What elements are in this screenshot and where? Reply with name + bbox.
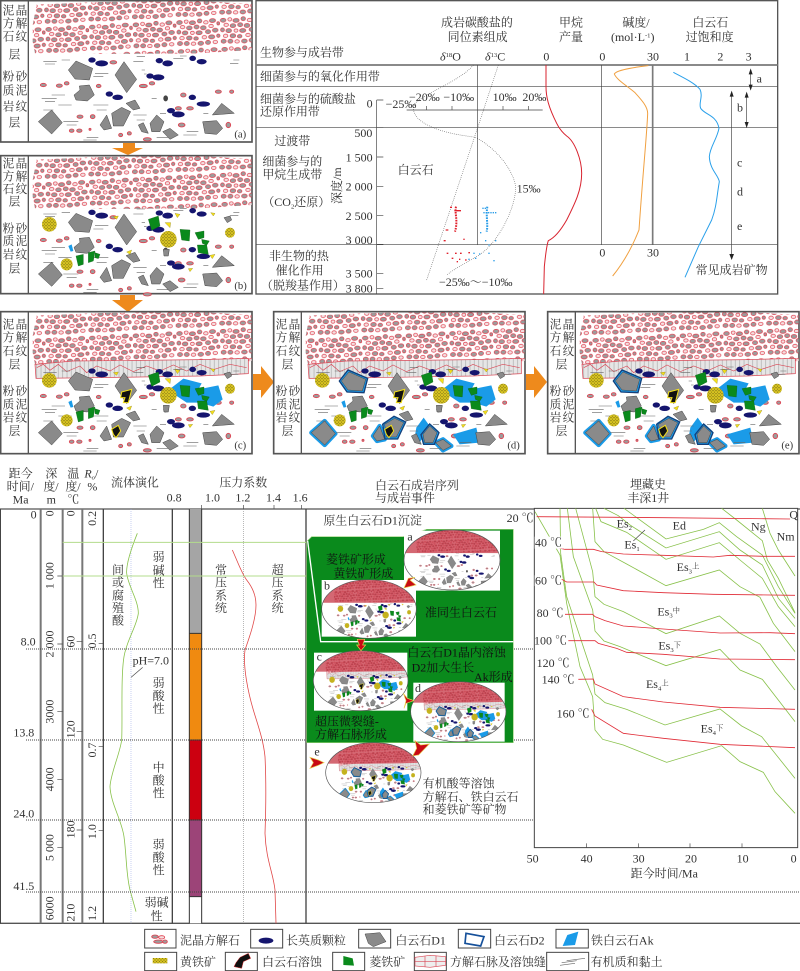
legend: organic matter and clay: 有机质和黏土: [591, 954, 663, 969]
time labels: 0: [31, 508, 37, 522]
arrow: c to d: [253, 366, 274, 398]
panel: stage (e): 粉砂: [550, 384, 576, 398]
fluid and pressure labels: 性: [153, 575, 165, 590]
panel: stage (b): (b): [234, 281, 247, 292]
zone arrows a b: c: [737, 156, 742, 170]
strata and isotherm labels: [534, 508, 798, 737]
legend: ankerite: 铁白云石Ak: [591, 932, 654, 947]
depth temperature Ro labels: 60: [64, 636, 78, 648]
depth temperature Ro labels: 1.2: [85, 906, 99, 921]
sequence event labels: c: [317, 649, 322, 663]
panel: stage (a): (a): [234, 129, 247, 140]
panel: stage (c): 岩纹: [3, 411, 29, 425]
pressure curve: [232, 550, 276, 923]
fluid and pressure labels: 超: [272, 562, 284, 577]
column headers: 甲烷: [559, 14, 583, 29]
panel: stage (c): (c): [234, 440, 247, 451]
strata and isotherm labels: 上: [661, 679, 669, 688]
isotope axis and depth labels: −25‰: [386, 97, 416, 111]
green highlight zone: [307, 529, 513, 743]
fluid and pressure labels: 统: [215, 600, 227, 615]
depth temperature Ro labels: 0.7: [85, 743, 99, 757]
strata and isotherm labels: Es: [657, 604, 669, 618]
zone arrows a b: a: [757, 72, 763, 86]
legend: [145, 929, 663, 971]
column headers: 2: [717, 49, 723, 63]
isotope axis and depth labels: 0: [599, 246, 605, 260]
strata and isotherm labels: 140 ℃: [542, 673, 575, 687]
isotope axis and depth labels: 1 500: [346, 151, 373, 165]
isotope axis and depth labels: −10‰: [443, 90, 474, 104]
strata and isotherm labels: Es: [701, 722, 713, 736]
time labels: 13.8: [13, 726, 34, 740]
isotope axis and depth labels: 白云石: [398, 163, 434, 177]
legend: micrite: [145, 929, 240, 948]
strata and isotherm labels: 60 ℃: [535, 573, 562, 587]
sequence event labels: d: [415, 681, 421, 695]
panel: stage (a): 石纹: [3, 31, 29, 44]
isotope axis and depth labels: 3 000: [346, 233, 373, 247]
strata and isotherm labels: 下: [674, 640, 682, 649]
fluid and pressure labels: 统: [272, 600, 284, 615]
strata and isotherm labels: Nm: [777, 529, 795, 543]
sequence event labels: 有机酸等溶蚀: [423, 776, 496, 791]
dolomite saturation curve: [673, 72, 719, 277]
strata and isotherm labels: 3: [689, 568, 693, 575]
strata and isotherm labels: 3: [670, 647, 674, 654]
strata and isotherm labels: 下: [716, 723, 724, 732]
legend: micrite: 泥晶方解石: [180, 932, 240, 947]
axis headers: Ma: [13, 492, 29, 506]
panel: stage (c): 质泥: [3, 397, 29, 411]
axis headers: R: [84, 466, 92, 480]
column headers: 产量: [559, 29, 583, 44]
axis headers: 1.6: [293, 490, 308, 504]
panel: stage (b): 方解: [3, 169, 29, 183]
legend: calcite vein: [414, 952, 546, 971]
panel: stage (c): 粉砂: [3, 384, 29, 398]
column headers: 3: [746, 49, 752, 63]
legend: pyrite: [145, 952, 216, 971]
panel: biogeochemical zones chart: [256, 1, 778, 295]
depth temperature Ro labels: 180: [64, 820, 78, 838]
panel: stage (d): (d): [507, 440, 520, 451]
panel: stage (e): 岩纹: [550, 411, 576, 425]
column headers: O: [452, 49, 461, 63]
panel: stage (e): (e): [781, 440, 794, 451]
zone labels: 还原）: [294, 195, 330, 209]
sequence event labels: 方解石、铁白云石: [423, 789, 519, 804]
fluid and pressure labels: 压: [215, 576, 227, 590]
panel: stage (e): 质泥: [550, 397, 576, 411]
zone labels: 催化作用: [276, 263, 324, 278]
sequence event labels: [314, 511, 534, 817]
zone labels: 细菌参与的氧化作用带: [260, 68, 380, 83]
panel: stage (b): 泥晶: [3, 158, 29, 171]
depth temperature Ro labels: 2 000: [42, 631, 56, 657]
strata and isotherm labels: 4: [713, 730, 717, 737]
depth temperature Ro labels: 120: [64, 720, 78, 738]
depth temperature Ro labels: 3000: [42, 700, 56, 724]
legend: dolomite D2: 白云石D2: [494, 933, 545, 947]
panel: stage (e): [548, 312, 799, 454]
column headers: 0: [599, 49, 605, 63]
depth temperature Ro labels: 6000: [42, 896, 56, 920]
column headers: δ: [440, 49, 446, 63]
sequence event labels: a: [407, 529, 413, 543]
isotope axis and depth labels: 深度/m: [329, 167, 344, 204]
fluid and pressure labels: 酸: [153, 850, 166, 864]
fluid and pressure labels: 腐: [112, 588, 124, 602]
fluid and pressure labels: 弱: [153, 676, 165, 690]
zone labels: 非生物的热: [269, 248, 330, 263]
depth temperature Ro labels: [42, 505, 302, 922]
panel: stage (d): 方解: [276, 331, 302, 345]
sequence event labels: 超压微裂缝-: [315, 713, 379, 728]
isotope axis and depth labels: 10‰: [493, 90, 517, 104]
burial heading: 丰深1井: [627, 490, 669, 505]
axis headers: m: [47, 492, 57, 506]
legend: dissolution: [225, 952, 323, 971]
panel: stage (c): 层: [9, 358, 22, 371]
depth temperature Ro labels: 0.5: [85, 634, 99, 648]
depth temperature Ro labels: 5 000: [42, 834, 56, 861]
legend: organic matter and clay: [547, 952, 663, 971]
column headers: 过饱和度: [686, 29, 734, 44]
strata and isotherm labels: Ng: [751, 519, 766, 533]
panel: stage (c): 泥晶: [3, 318, 29, 331]
isotope axis and depth labels: 2 000: [346, 180, 373, 194]
zone labels: 生物参与成岩带: [260, 45, 344, 60]
burial strata curves: [535, 508, 795, 813]
panel: stage (a): 泥晶: [3, 4, 29, 17]
isotope axis and depth labels: 3 800: [346, 281, 373, 295]
axis headers: [7, 465, 308, 506]
column headers: 18: [446, 52, 453, 59]
ellipse b: [322, 580, 418, 640]
zone labels: 2: [291, 204, 294, 211]
stratigraphic acidity column: [189, 509, 202, 923]
burial time axis: 40: [581, 851, 593, 865]
column headers: ): [650, 30, 654, 44]
zone arrows a b: 常见成岩矿物: [696, 262, 768, 277]
fluid evolution curve: [110, 533, 138, 912]
fluid and pressure labels: 性: [151, 908, 163, 923]
methane curve: [544, 65, 582, 294]
fluid and pressure labels: 弱: [153, 837, 165, 851]
burial heading: [627, 477, 669, 505]
sequence event labels: Ak形成: [474, 669, 513, 684]
ellipse d: [411, 682, 507, 742]
fluid and pressure labels: 中: [153, 759, 165, 774]
legend: dissolution: 白云石溶蚀: [262, 954, 323, 969]
axis headers: /: [95, 466, 99, 480]
isotherms: [537, 517, 795, 748]
strata and isotherm labels: 100 ℃: [534, 634, 567, 648]
panel: stage (b): 石纹: [3, 183, 29, 196]
depth temperature Ro labels: 1 000: [42, 562, 56, 589]
panel: stage (e): 石纹: [550, 345, 576, 358]
fluid and pressure labels: 殖: [112, 600, 124, 615]
strata and isotherm labels: 40 ℃: [535, 535, 562, 549]
axis headers: 距今: [9, 465, 33, 480]
panel: stage (a): 质泥: [3, 84, 29, 98]
burial time axis: 50: [527, 851, 539, 865]
axis headers: 1.4: [266, 490, 281, 504]
isotope axis and depth labels: 30: [647, 246, 659, 260]
sequence event labels: 方解石脉形成: [315, 727, 387, 742]
axis headers: 度/: [65, 478, 81, 493]
sequence heading: 白云石成岩序列: [375, 477, 459, 492]
column headers: C: [497, 49, 505, 63]
arrow: d to e: [526, 366, 547, 398]
red arrows: [310, 577, 429, 768]
panel: stage (a): 方解: [3, 16, 29, 30]
legend: calcite vein: 方解石脉及溶蚀缝: [450, 954, 546, 969]
zone arrows a b: d: [737, 185, 743, 199]
time labels: 41.5: [13, 879, 34, 893]
zone labels: （CO: [262, 195, 291, 209]
alkalinity curve: [613, 66, 648, 276]
column headers: δ: [485, 49, 491, 63]
fluid and pressure labels: 或: [112, 576, 124, 590]
legend: siderite: [333, 952, 405, 971]
zone labels: 过渡带: [274, 133, 310, 148]
zone arrows a b: e: [737, 219, 742, 233]
fluid and pressure labels: 碱: [153, 562, 165, 577]
panel: stage (b): 质泥: [3, 234, 29, 248]
arrow: b to c: [112, 295, 143, 312]
panel: burial history chart: [527, 477, 798, 881]
fluid and pressure labels: pH=7.0: [133, 654, 169, 668]
isotope axis and depth labels: [329, 90, 659, 295]
legend: dolomite D2: [458, 929, 545, 948]
isotope dotted trends: [414, 65, 516, 280]
isotope axis and depth labels: −20‰: [409, 90, 440, 104]
zone labels: [260, 45, 380, 292]
axis headers: 压力系数: [219, 475, 267, 490]
depth temperature Ro labels: 4000: [42, 767, 56, 791]
arrow: a to b: [112, 143, 143, 155]
strata and isotherm labels: 1: [636, 546, 640, 553]
strata and isotherm labels: 2: [629, 525, 632, 532]
column headers: -1: [645, 33, 650, 40]
panel: stage (c): [1, 312, 252, 454]
isotope data points: [444, 207, 497, 262]
legend: dolomite D1: [359, 929, 446, 948]
fluid and pressure labels: 酸: [112, 614, 125, 628]
panel: stage (d): 层: [282, 425, 295, 438]
sequence event labels: 20 ℃: [507, 511, 534, 525]
panel: stage (b): [1, 156, 252, 296]
fluid and pressure labels: 酸: [153, 689, 166, 703]
zone labels: 甲烷生成带: [262, 166, 322, 181]
fluid and pressure labels: 系: [272, 588, 284, 602]
zone arrows a b: [696, 68, 768, 277]
isotope axis and depth labels: −25‰～−10‰: [439, 275, 512, 289]
isotope axis and depth labels: 2 500: [346, 209, 373, 223]
fluid and pressure labels: 弱碱: [145, 895, 169, 910]
fluid and pressure labels: 性: [153, 785, 165, 800]
strata and isotherm labels: Q: [789, 508, 798, 522]
panel: stage (c): 方解: [3, 331, 29, 345]
zone labels: （脱羧基作用）: [261, 277, 345, 292]
sequence event labels: 准同生白云石: [425, 604, 497, 619]
panel: stage (d): 粉砂: [276, 384, 302, 398]
axis headers: 时间/: [7, 478, 35, 493]
panel: stage (a): 岩纹: [3, 100, 29, 114]
panel: dolomite diagenetic sequence: [307, 477, 534, 817]
sequence event labels: 白云石D1晶内溶蚀: [407, 644, 507, 659]
panel: stage (e): 层: [556, 425, 569, 438]
depth temperature Ro labels: 210: [64, 904, 78, 922]
panel: stage (a): 粉砂: [3, 70, 29, 84]
fluid and pressure labels: 弱: [153, 550, 165, 564]
panel: stage (e): 层: [556, 358, 569, 371]
axis headers: 度/: [43, 478, 59, 493]
panel: stage (d): 层: [282, 358, 295, 371]
column headers: 30: [647, 49, 659, 63]
time labels: 24.0: [13, 806, 34, 820]
isotope axis and depth labels: 0: [367, 96, 373, 110]
sequence heading: 与成岩事件: [375, 490, 435, 505]
column headers: 1: [684, 49, 690, 63]
panel: stage (c): 石纹: [3, 345, 29, 358]
strata and isotherm labels: 中: [673, 606, 680, 615]
axis headers: 深: [45, 466, 57, 480]
burial time axis: [527, 843, 797, 881]
panel: stage (e): 方解: [550, 331, 576, 345]
burial time axis: 0: [791, 851, 797, 865]
sequence event labels: D2加大生长: [412, 660, 474, 675]
depth temperature Ro labels: 0: [42, 510, 56, 516]
strata and isotherm labels: 160 ℃: [557, 707, 590, 721]
axis headers: 0.8: [167, 490, 182, 504]
legend: feldspar grain: [251, 929, 346, 948]
axis headers: 温: [67, 466, 79, 480]
sequence event labels: e: [314, 744, 320, 758]
strata and isotherm labels: 80 ℃: [537, 606, 564, 620]
axis headers: 1.2: [235, 490, 250, 504]
strata and isotherm labels: Es: [658, 639, 670, 653]
time labels: [13, 508, 37, 893]
strata and isotherm labels: Es: [646, 677, 658, 691]
column headers: (mol·L: [611, 30, 645, 44]
strata and isotherm labels: 120 ℃: [537, 656, 570, 670]
panel: stage (d): 岩纹: [276, 411, 302, 425]
panel: stage (b): 粉砂: [3, 221, 29, 235]
fluid and pressure labels: 性: [153, 701, 165, 716]
panel: stage (b): 层: [9, 196, 22, 209]
panel: stage (d): [274, 312, 525, 454]
burial time axis: 10: [737, 851, 749, 865]
fluid and pressure labels: 常: [215, 562, 227, 577]
burial time axis: 20: [685, 851, 697, 865]
axis headers: 1.0: [205, 490, 220, 504]
burial heading: 埋藏史: [630, 477, 666, 492]
isotope axis and depth labels: 500: [354, 126, 372, 140]
panel: fluid evolution and pressure chart: [0, 465, 800, 923]
fluid and pressure labels: 系: [215, 588, 227, 602]
legend: ankerite: [556, 929, 654, 948]
sequence event labels: 菱铁矿形成: [326, 552, 386, 567]
panel: stage (d): 石纹: [276, 345, 302, 358]
axis headers: ℃: [67, 492, 79, 506]
zone labels: 还原作用带: [260, 104, 320, 119]
panel: stage (d): 质泥: [276, 397, 302, 411]
isotope axis and depth labels: 15‰: [517, 181, 541, 195]
legend: dolomite D1: 白云石D1: [395, 933, 446, 947]
sequence event labels: 和菱铁矿等矿物: [423, 802, 507, 817]
ellipse c: [313, 651, 410, 711]
time dashed lines: [26, 649, 800, 892]
column headers: 同位素组成: [448, 29, 508, 44]
isotope axis and depth labels: 3 500: [346, 266, 373, 280]
legend: siderite: 菱铁矿: [369, 954, 405, 969]
fluid and pressure labels: 压: [272, 576, 284, 590]
column headers: 成岩碳酸盐的: [441, 14, 513, 29]
depth temperature Ro labels: 0.2: [85, 511, 99, 526]
axis headers: o: [92, 474, 96, 481]
legend: feldspar grain: 长英质颗粒: [286, 932, 346, 947]
zone labels: 细菌参与的硫酸盐: [260, 91, 356, 106]
strata and isotherm labels: Es: [617, 517, 629, 531]
column headers: 白云石: [692, 15, 728, 29]
axis headers: 流体演化: [111, 475, 159, 490]
burial time axis: 距今时间/Ma: [631, 866, 699, 881]
strata and isotherm labels: 4: [658, 685, 662, 692]
fluid and pressure labels: [112, 550, 284, 923]
fluid and pressure labels: 性: [153, 862, 165, 877]
isotope axis and depth labels: 20‰: [522, 90, 546, 104]
column headers: 0: [543, 49, 549, 63]
depth temperature Ro labels: 0: [64, 510, 78, 516]
column headers: 碱度/: [622, 14, 650, 29]
panel: stage (e): 泥晶: [550, 318, 576, 331]
sequence event labels: 黄铁矿形成: [333, 566, 393, 581]
zone arrows a b: b: [737, 100, 743, 114]
burial time axis: 30: [633, 851, 645, 865]
time labels: 8.0: [21, 635, 36, 649]
ellipse a: [404, 530, 500, 590]
strata and isotherm labels: Es: [624, 538, 636, 552]
sequence event labels: 原生白云石D1沉淀: [323, 512, 422, 527]
panel: stage (a): 层: [9, 117, 22, 130]
ellipse e: [326, 743, 422, 803]
strata and isotherm labels: Es: [677, 560, 689, 574]
panel: stage (d): 泥晶: [276, 318, 302, 331]
column headers: 13: [491, 52, 498, 59]
axis headers: %: [87, 479, 97, 493]
sequence heading: [375, 477, 459, 505]
fluid and pressure labels: 酸: [153, 773, 166, 787]
column headers: [440, 14, 752, 63]
strata and isotherm labels: 上: [692, 562, 700, 571]
panel: stage (c): 层: [9, 425, 22, 438]
legend: pyrite: 黄铁矿: [180, 954, 216, 969]
panel: stage (a): 层: [9, 49, 22, 62]
panel: stage (b): 岩纹: [3, 247, 29, 261]
panel: stage (b): 层: [9, 262, 22, 275]
strata and isotherm labels: Ed: [673, 519, 686, 533]
panel: stage (a): [1, 1, 252, 142]
zone labels: 细菌参与的: [262, 154, 322, 169]
depth temperature Ro labels: 1.0: [85, 824, 99, 839]
sequence event labels: b: [324, 579, 330, 593]
strata and isotherm labels: 3: [669, 613, 673, 620]
fluid and pressure labels: 间: [112, 562, 124, 577]
